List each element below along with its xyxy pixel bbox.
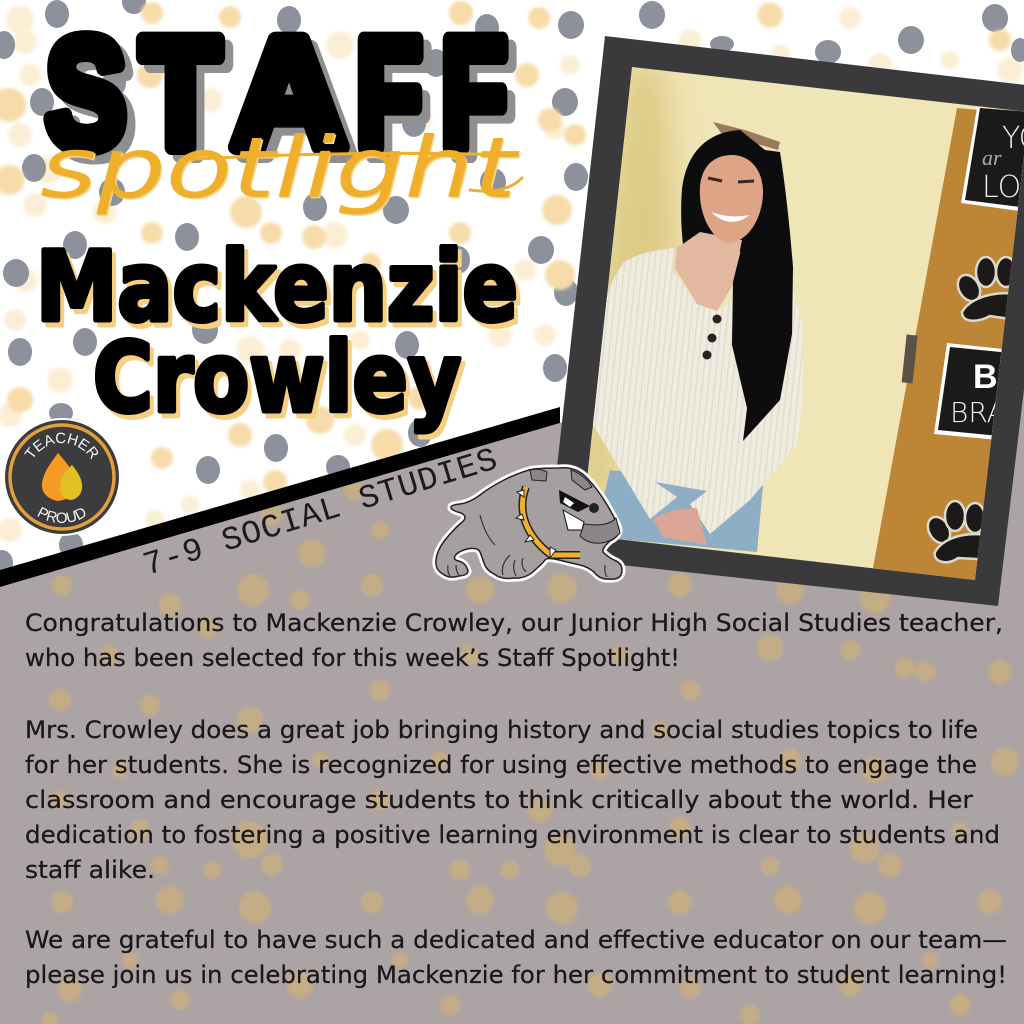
name: Mackenzie Crowley xyxy=(36,231,522,439)
hair front xyxy=(732,150,793,441)
name: Mackenzie Crowley: Crowley xyxy=(97,327,465,439)
paragraph 1 xyxy=(25,609,1003,672)
paragraph 1: Congratulations to Mackenzie Crowley, our Junior High Social Studies teacher, xyxy=(25,609,1003,637)
woman xyxy=(587,122,803,552)
paragraph 2: for her students. She is recognized for using effective methods to engage the xyxy=(25,751,977,779)
title: STAFF: F xyxy=(441,7,507,181)
icon: bulldog mascot xyxy=(436,468,622,579)
title: STAFF: F xyxy=(364,15,430,189)
panel: taupe lower section xyxy=(0,300,1024,1024)
paragraph 2 xyxy=(25,716,1000,884)
face xyxy=(700,155,763,243)
icon: Teacher Proud badge: PROUD xyxy=(37,506,86,524)
hair back xyxy=(681,130,770,255)
paragraph 2: classroom and encourage students to think critically about the world. Her xyxy=(25,786,973,814)
title: STAFF: F xyxy=(449,15,515,189)
buttons xyxy=(712,314,722,324)
title: STAFF: A xyxy=(240,15,354,189)
paragraph 2: staff alike. xyxy=(25,856,155,884)
title: STAFF: S xyxy=(54,15,134,189)
subtitle: spotlight: spotlight xyxy=(40,119,520,217)
icon: Teacher Proud badge: TEACHER xyxy=(24,432,98,460)
body text xyxy=(25,609,1007,989)
subtitle: spotlight: spotlight xyxy=(42,120,521,218)
paragraph 3: please join us in celebrating Mackenzie for her commitment to student learning! xyxy=(25,961,1007,989)
photo frame xyxy=(547,36,1024,606)
name: Mackenzie Crowley: Mackenzie xyxy=(40,236,522,348)
title: STAFF: A xyxy=(232,7,346,181)
name: Mackenzie Crowley: Mackenzie xyxy=(36,231,518,343)
title: STAFF xyxy=(46,7,515,189)
paragraph 3: We are grateful to have such a dedicated and effective educator on our team— xyxy=(25,926,1007,954)
paragraph 3 xyxy=(25,926,1007,989)
door with signs: Be xyxy=(973,358,1016,396)
paragraph 2: Mrs. Crowley does a great job bringing history and social studies topics to life xyxy=(25,716,978,744)
title: STAFF: F xyxy=(356,7,422,181)
title: STAFF: T xyxy=(141,7,220,181)
neck and chest xyxy=(675,232,742,311)
paragraph 1: who has been selected for this week’s Staff Spotlight! xyxy=(25,644,680,672)
photo: teacher by classroom door xyxy=(588,67,1024,580)
jeans xyxy=(603,470,763,552)
icon: Teacher Proud badge xyxy=(5,418,119,536)
hands xyxy=(653,508,707,545)
sunglasses xyxy=(713,122,780,150)
paragraph 2: dedication to fostering a positive learning environment is clear to students and xyxy=(25,821,1000,849)
door with signs xyxy=(873,108,1024,582)
diagonal black band xyxy=(0,407,560,587)
sweater xyxy=(587,248,803,534)
door with signs: ar xyxy=(982,145,1002,170)
door with signs: BRA xyxy=(950,396,1006,429)
title: STAFF: S xyxy=(46,7,126,181)
name: Mackenzie Crowley: Crowley xyxy=(93,322,461,434)
label: grade and subject: 7-9 SOCIAL STUDIES xyxy=(139,442,502,585)
wall xyxy=(588,67,1024,580)
title: STAFF: T xyxy=(149,15,228,189)
